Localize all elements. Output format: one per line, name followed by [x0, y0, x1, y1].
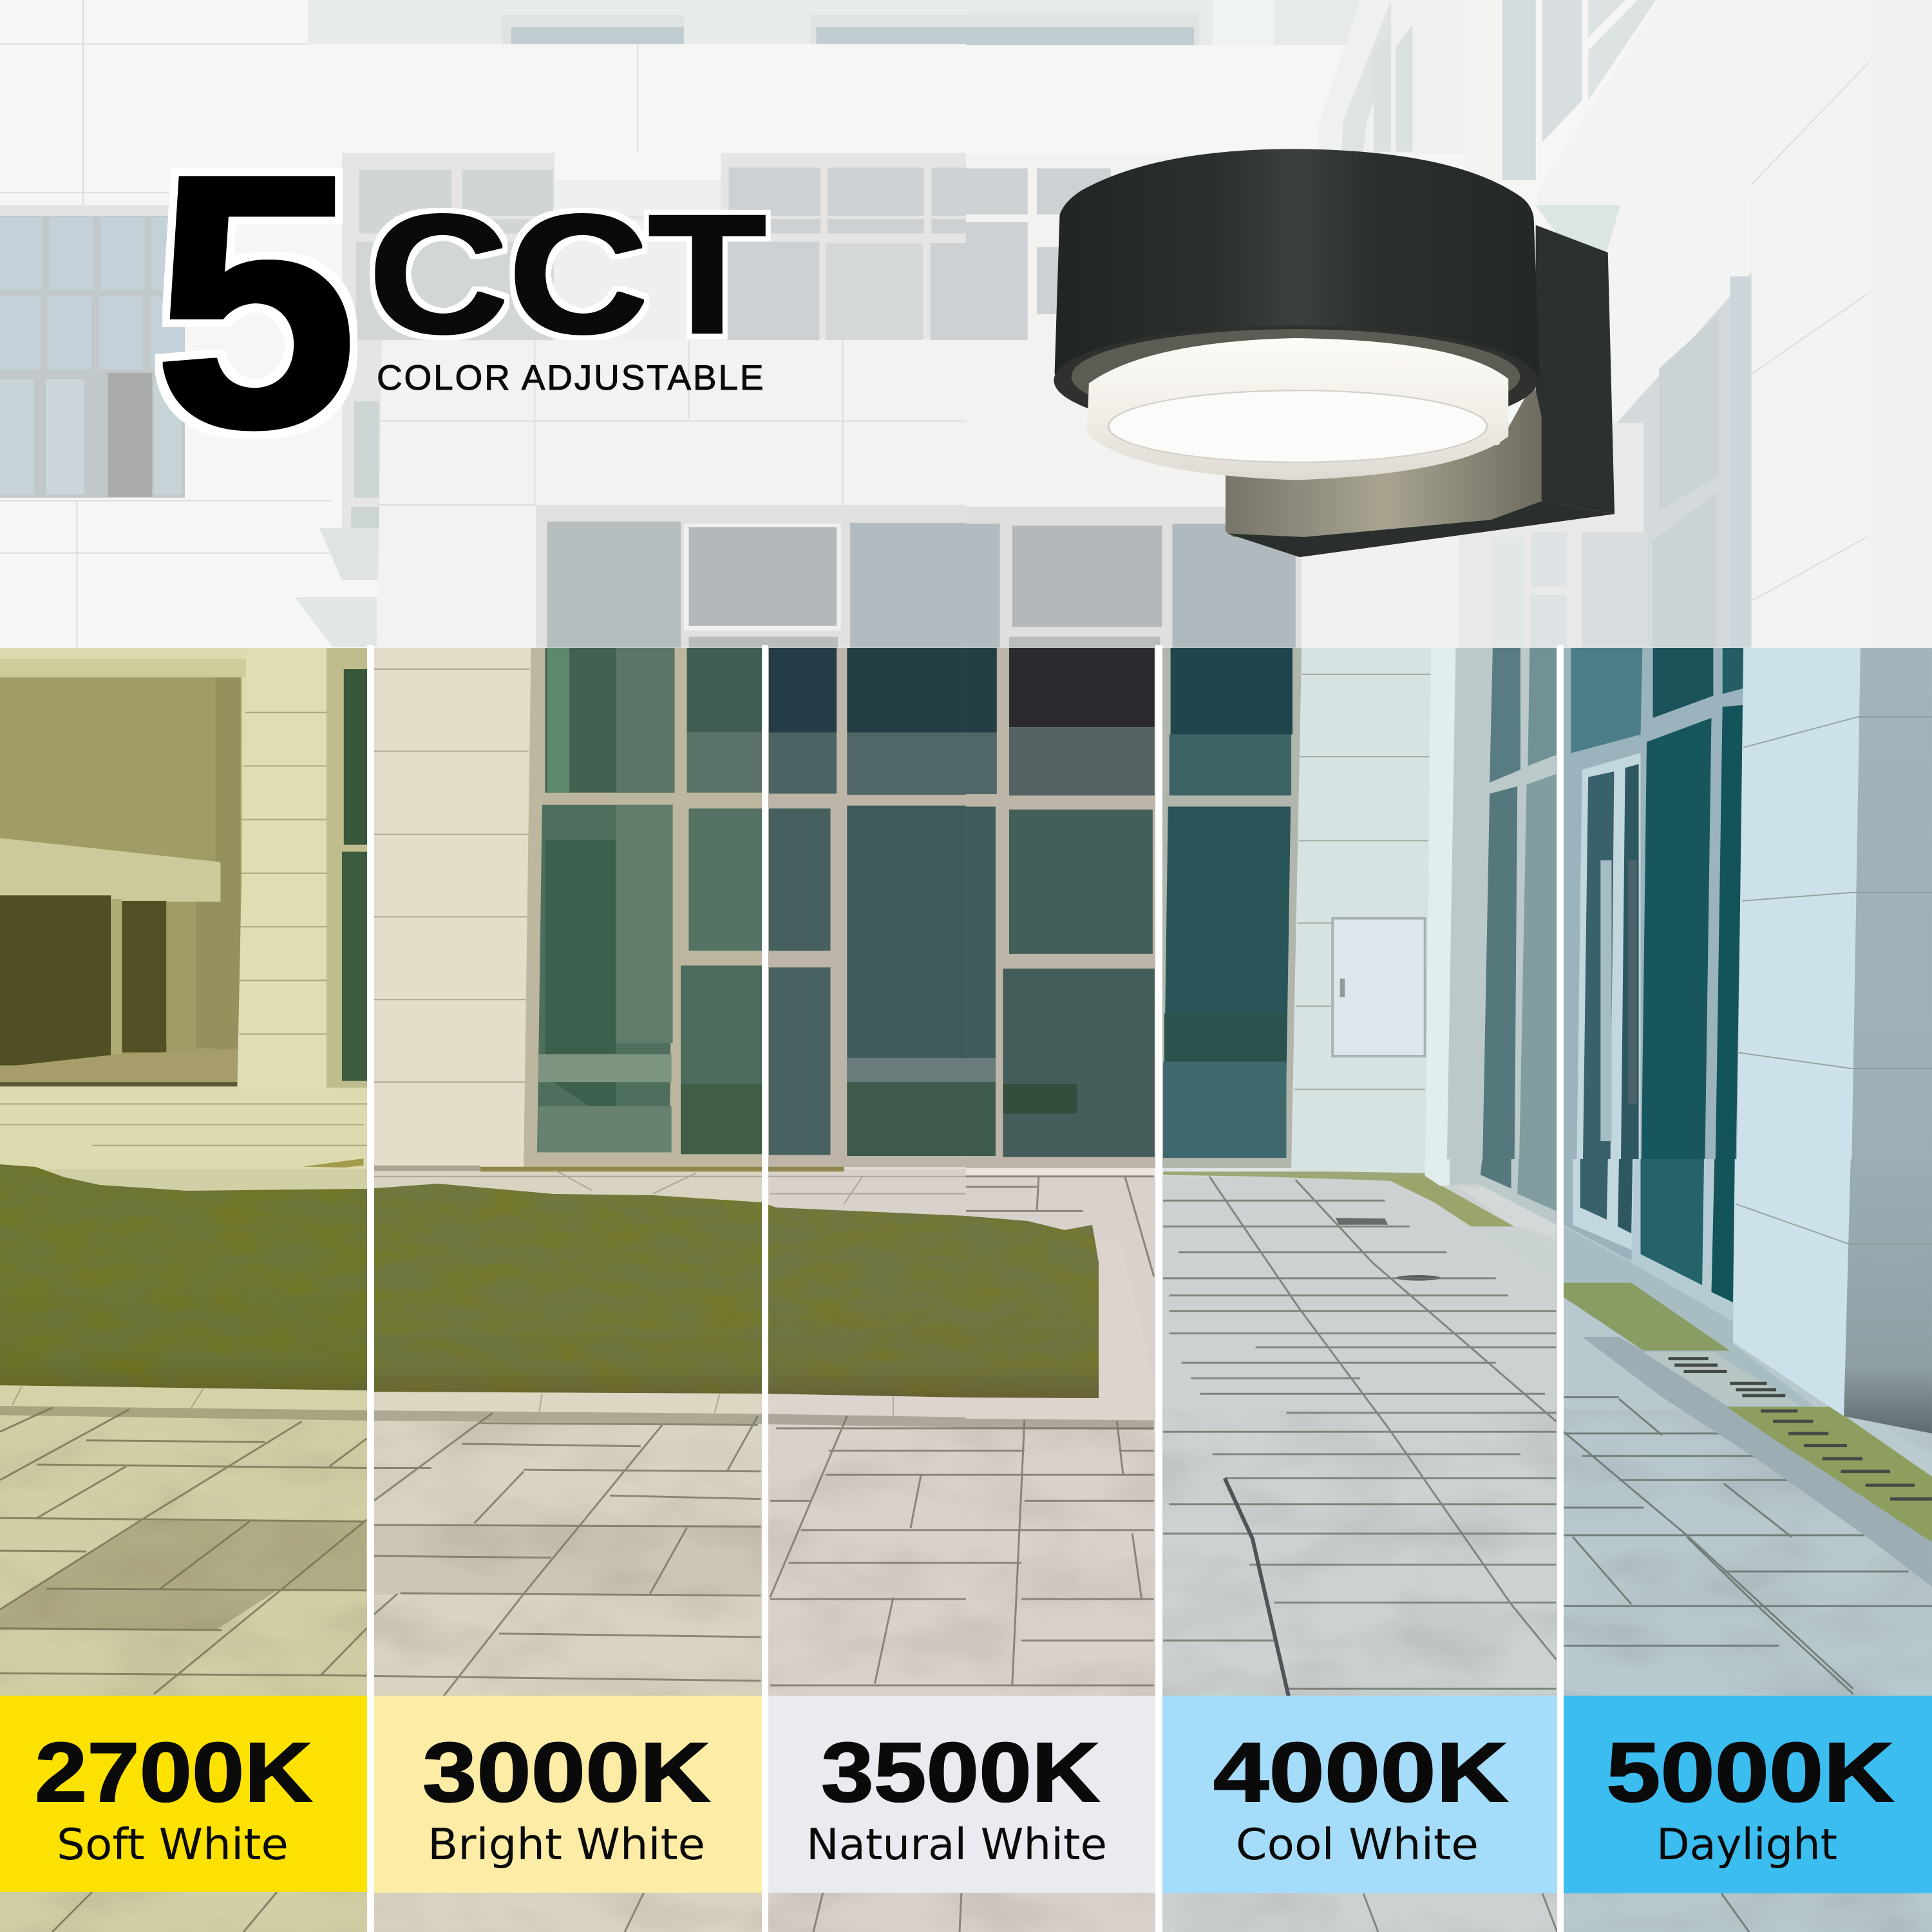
tint: 4000K [1159, 648, 1560, 1932]
right upper windows [394, 153, 966, 340]
wall base left [0, 644, 966, 1169]
column dividers [367, 645, 1564, 1932]
name: Daylight: Daylight [1656, 1819, 1837, 1870]
lower glazing [1302, 423, 1647, 649]
main window head [536, 505, 966, 648]
title: 5 CCT Color Adjustable [153, 100, 766, 502]
colour temperature bar: 3000K Bright White [374, 1696, 762, 1893]
glass behind pillar left [327, 644, 370, 1088]
value: 5000K: 5000K [1606, 1725, 1894, 1819]
light drain grates [1643, 1352, 1801, 1406]
fixture lens face [1108, 390, 1487, 462]
forecourt paving above lawn [0, 1104, 966, 1204]
side panes column four [1482, 648, 1556, 1209]
tint: 2700K [0, 648, 370, 1932]
covered passage [0, 659, 247, 1086]
paving joints column three right [966, 1177, 1154, 1685]
tint: 3500K [765, 648, 1159, 1932]
photo: building lower section and paving [0, 644, 1932, 1932]
colour temperature bar: 5000K Daylight [1564, 1696, 1932, 1893]
main window panes [547, 522, 966, 648]
column five glass base [1631, 1159, 1736, 1323]
recessed bay [1613, 197, 1752, 648]
top balcony left [308, 0, 966, 44]
lawn [0, 1159, 1108, 1404]
paving mottling [0, 1410, 1932, 1932]
curb dark strip [0, 1406, 966, 1428]
walls and glass, right half [966, 644, 1932, 1224]
upper facade band [966, 45, 1348, 154]
paving joints, right half [966, 1159, 1932, 1700]
big numeral 5: 5 [153, 100, 358, 502]
top balcony right [966, 0, 1360, 45]
fixture lens ring [1087, 338, 1508, 480]
glass panes column four [1163, 648, 1293, 1158]
colour temperature bar: 3500K Natural White [768, 1696, 1155, 1893]
colour temperature bar: 2700K Soft White [0, 1696, 367, 1892]
pillar left with joints [237, 644, 336, 1090]
wall corner strip [1425, 648, 1455, 1184]
column four side glazing base [1450, 1159, 1556, 1225]
worn paving patch column one [0, 1520, 366, 1630]
left window block [0, 205, 185, 498]
upper building, right half [966, 0, 1932, 649]
centre upper window [342, 153, 554, 578]
grate slots [1669, 1359, 1932, 1499]
colour temperature bar: 4000K Cool White [1162, 1696, 1557, 1893]
wall base right [966, 644, 1932, 1177]
canopy glass [294, 528, 377, 647]
tint: 3000K [370, 648, 765, 1932]
name: Natural White: Natural White [806, 1819, 1107, 1870]
pavers below colour bars [52, 1892, 1749, 1932]
curb dark strip right [966, 1419, 1154, 1430]
wall with utility panel [1293, 648, 1431, 1173]
glass panes column two [537, 648, 766, 1154]
pillar light [1868, 0, 1932, 648]
paving joints column one [0, 1408, 366, 1694]
paving joints column three [770, 1416, 966, 1685]
glass panes column three, right part [966, 648, 1155, 1157]
angled wing [1318, 0, 1465, 154]
fixture lower edge [1227, 501, 1615, 557]
column four wall base [1293, 1159, 1425, 1173]
column four corner strips [1425, 1159, 1450, 1186]
window wall frame [524, 644, 966, 1167]
mossy drain grates lower [1727, 1407, 1932, 1542]
moss patch [1385, 1178, 1514, 1226]
main window panes right [966, 524, 1296, 648]
pillar right [1736, 644, 1932, 1224]
fixture rim highlight [1072, 329, 1520, 424]
walls and glass, left half [0, 644, 966, 1169]
paving joints column five [1564, 1397, 1932, 1694]
column five door base [1564, 1159, 1638, 1263]
value: 4000K: 4000K [1213, 1725, 1508, 1819]
building stone edge [1459, 1187, 1556, 1240]
name: Soft White: Soft White [57, 1819, 289, 1870]
drain slots strip [1477, 1228, 1556, 1278]
tint: 5000K [1560, 648, 1932, 1932]
paving base [0, 1082, 1932, 1932]
manhole covers [1336, 1218, 1388, 1225]
colour temperature tints [0, 648, 1932, 1932]
curb corner [966, 1242, 1154, 1419]
name: Cool White: Cool White [1236, 1819, 1479, 1870]
front parapet block [377, 340, 966, 657]
value: 3000K: 3000K [422, 1725, 710, 1819]
window wall frame center [966, 644, 1302, 1168]
fixture bottom rim [1054, 326, 1538, 435]
dark paving seam column four [1225, 1479, 1289, 1700]
main window head right [966, 507, 1302, 649]
drain strip top [1163, 1171, 1439, 1183]
value: 2700K: 2700K [35, 1725, 312, 1819]
mossy drain grates [1564, 1283, 1730, 1350]
pillar base [1733, 1159, 1932, 1434]
canopy glass near fixture [1536, 205, 1620, 251]
glass panes column three [769, 648, 966, 1156]
facade panel lines [0, 0, 638, 657]
product: wall light fixture [1054, 149, 1615, 557]
photo: washed-out upper building [0, 0, 1932, 657]
second stone strip [1582, 1337, 1932, 1587]
fixture underside glow [1226, 382, 1542, 537]
windows behind fixture [966, 154, 1225, 507]
heading CCT: CCT [368, 180, 766, 368]
fixture back plate [1536, 225, 1615, 514]
window wall side, dark section [1446, 648, 1564, 1224]
large white facade [1536, 0, 1932, 648]
paving joints column four [1163, 1177, 1556, 1689]
name: Bright White: Bright White [428, 1819, 705, 1870]
upper building, left half [0, 0, 966, 657]
paving joints and grass, left half [0, 1104, 966, 1700]
curb base [0, 1385, 966, 1428]
subheading: COLOR ADJUSTABLE [377, 357, 764, 397]
curb joints [12, 1387, 893, 1416]
stone strip along building [1564, 1226, 1932, 1504]
fixture cylinder body [1055, 149, 1540, 402]
worn paving patch column two [374, 1525, 761, 1595]
pillar center with joints [370, 644, 531, 1165]
pale stone strip by pillar [1832, 1419, 1932, 1479]
side column and diagonal glazing [1464, 0, 1656, 428]
value: 3500K: 3500K [821, 1725, 1100, 1819]
pillar lines [1747, 63, 1868, 603]
column five glazing and door [1564, 644, 1748, 1224]
paving joints column two [374, 1413, 761, 1700]
